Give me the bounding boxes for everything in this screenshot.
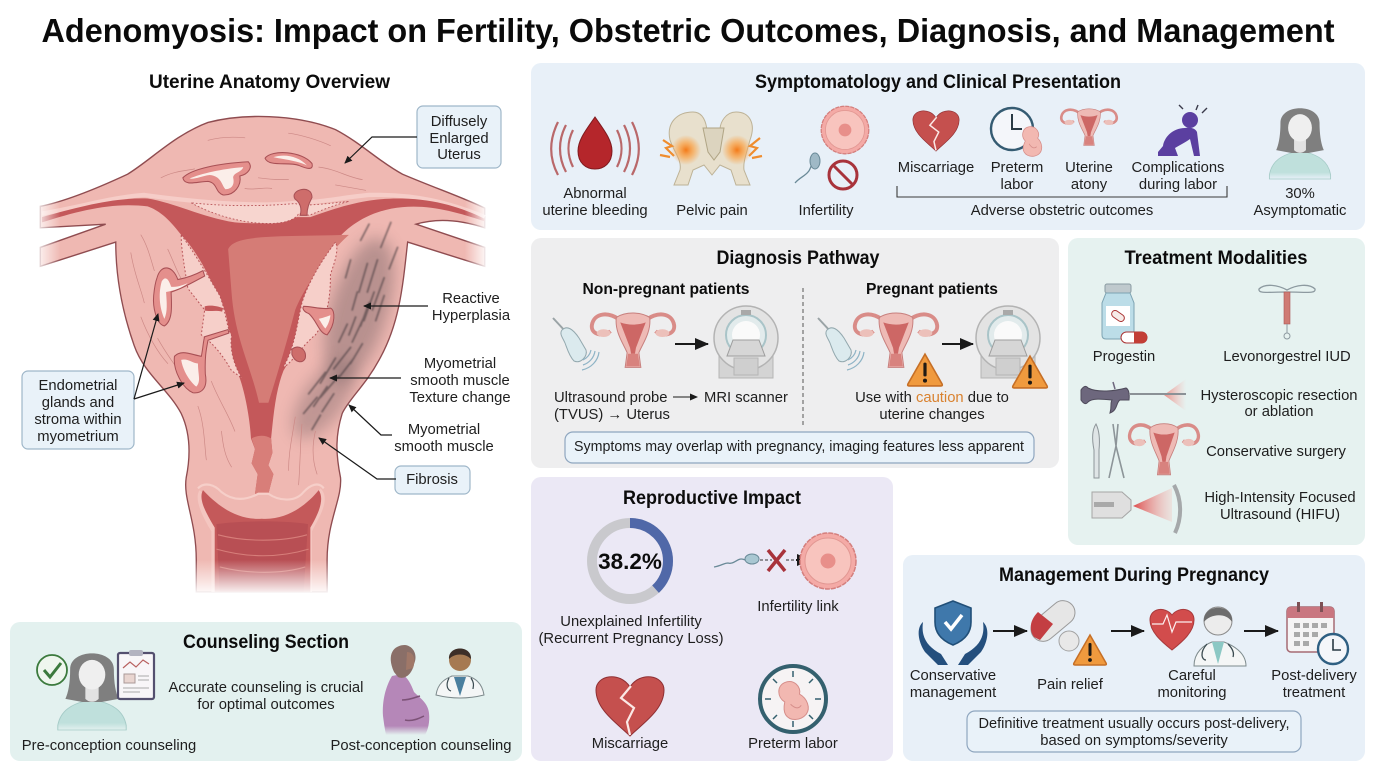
label: myometrial texture change: Texture change	[409, 390, 511, 406]
flow: non-pregnant imaging	[553, 306, 778, 378]
item: complications during labor: during labor	[1139, 177, 1217, 193]
chart: 38.2% donut: Unexplained Infertility	[560, 614, 702, 630]
icon: careful monitoring: monitoring	[1157, 685, 1227, 701]
icon: infertility link	[714, 533, 856, 615]
callout: diffusely enlarged uterus: Enlarged	[429, 131, 489, 147]
text: pregnant caption: uterine changes	[879, 407, 985, 423]
label: pre-conception: Pre-conception counseling	[22, 738, 196, 754]
icon: pregnant woman	[383, 645, 429, 735]
icon: post-delivery treatment: treatment	[1283, 685, 1345, 701]
icon: careful monitoring: Careful	[1168, 668, 1216, 684]
text: pregnant caption: Use with caution due to	[855, 390, 1009, 406]
icon: pain relief: Pain relief	[1037, 677, 1104, 693]
item: progestin	[1093, 284, 1155, 365]
item: hysteroscopic resection	[1081, 379, 1358, 420]
icon: woman	[58, 653, 126, 730]
panel: reproductive impact	[531, 477, 893, 761]
subheading: pregnant: Pregnant patients	[866, 281, 998, 298]
icon: check mark	[37, 655, 67, 685]
panel: symptomatology	[531, 63, 1365, 230]
item: progestin: Progestin	[1093, 349, 1155, 365]
heading: management: Management During Pregnancy	[999, 564, 1269, 586]
item: preterm labor	[991, 108, 1043, 193]
title: Adenomyosis: Impact on Fertility, Obstetric Outcomes, Diagnosis, and Management	[42, 12, 1334, 49]
label: myometrial texture change: smooth muscle	[410, 373, 510, 389]
panel: management during pregnancy	[903, 555, 1365, 761]
item: complications during labor: Complications	[1132, 160, 1224, 176]
icon: miscarriage heart	[592, 677, 668, 752]
item: asymptomatic: 30%	[1285, 186, 1315, 202]
label: myometrial smooth muscle: smooth muscle	[394, 439, 494, 455]
icon: preterm clock: Preterm labor	[748, 736, 838, 752]
item: conservative surgery: Conservative surgery	[1206, 444, 1346, 460]
callout: diffusely enlarged uterus: Uterus	[437, 147, 481, 163]
bracket: adverse obstetric outcomes	[897, 186, 1227, 219]
item: abnormal uterine bleeding: uterine bleeding	[542, 203, 648, 219]
item: HIFU: Ultrasound (HIFU)	[1220, 507, 1340, 523]
flow: pregnant imaging	[818, 306, 1047, 388]
item: asymptomatic	[1254, 108, 1347, 219]
chart: 38.2% donut	[538, 523, 724, 647]
text: counseling message: Accurate counseling is crucial	[169, 680, 363, 696]
panel: uterine anatomy	[22, 71, 511, 596]
label: myometrial texture change	[330, 356, 511, 406]
label: myometrial smooth muscle	[349, 405, 494, 455]
label: reactive hyperplasia	[364, 291, 511, 324]
item: uterine atony: Uterine	[1065, 160, 1113, 176]
item: preterm labor: Preterm	[991, 160, 1043, 176]
label: myometrial texture change: Myometrial	[424, 356, 496, 372]
item: hysteroscopic resection: or ablation	[1244, 404, 1314, 420]
icon: clipboard	[118, 650, 154, 699]
text: non-pregnant caption	[554, 390, 788, 423]
heading: uterine anatomy: Uterine Anatomy Overview	[149, 71, 391, 93]
heading: treatment: Treatment Modalities	[1124, 247, 1308, 269]
heading: reproductive: Reproductive Impact	[623, 487, 801, 509]
icon: conservative management	[910, 601, 996, 701]
icon: miscarriage heart: Miscarriage	[592, 736, 668, 752]
chart: 38.2% donut: (Recurrent Pregnancy Loss)	[538, 631, 724, 647]
label: myometrial smooth muscle: Myometrial	[408, 422, 480, 438]
text: pregnant caption	[855, 390, 1009, 423]
item: complications during labor	[1132, 105, 1224, 193]
icon: preterm clock	[748, 666, 838, 752]
text: counseling message: for optimal outcomes	[197, 697, 335, 713]
icon: conservative management: Conservative	[910, 668, 996, 684]
callout: endometrial glands: glands and	[42, 395, 114, 411]
panel: treatment modalities	[1068, 238, 1365, 545]
bracket: adverse obstetric outcomes: Adverse obstetric outcomes	[971, 203, 1153, 219]
icon: careful monitoring	[1150, 607, 1246, 701]
item: pelvic pain: Pelvic pain	[676, 203, 748, 219]
icon: doctor	[436, 648, 484, 698]
icon: conservative management: management	[910, 685, 996, 701]
heading: counseling: Counseling Section	[183, 631, 349, 653]
label: post-conception: Post-conception counseling	[331, 738, 511, 754]
item: HIFU	[1092, 485, 1356, 533]
callout: fibrosis: Fibrosis	[406, 472, 458, 488]
icon: infertility link: Infertility link	[757, 599, 839, 615]
icon: post-delivery treatment	[1271, 602, 1357, 701]
item: uterine atony: atony	[1071, 177, 1108, 193]
item: levonorgestrel IUD	[1223, 285, 1351, 365]
icon: post-delivery treatment: Post-delivery	[1271, 668, 1357, 684]
text: non-pregnant caption: MRI scanner	[704, 390, 788, 406]
callout: diffusely enlarged uterus	[345, 106, 501, 168]
heading: diagnosis: Diagnosis Pathway	[716, 247, 880, 269]
label: reactive hyperplasia: Reactive	[442, 291, 500, 307]
chart: 38.2% donut: 38.2%	[598, 549, 662, 574]
callout: endometrial glands: Endometrial	[39, 378, 117, 394]
item: miscarriage	[898, 111, 974, 176]
icon: pain relief	[1026, 596, 1106, 693]
callout: overlap note: Symptoms may overlap with pregnancy, imaging features less apparent	[574, 439, 1024, 455]
item: asymptomatic: Asymptomatic	[1254, 203, 1347, 219]
callout: definitive treatment	[967, 711, 1301, 752]
subheading: non-pregnant: Non-pregnant patients	[582, 281, 750, 298]
item: uterine atony	[1061, 109, 1117, 193]
callout: diffusely enlarged uterus: Diffusely	[431, 114, 488, 130]
item: pelvic pain	[660, 112, 762, 219]
callout: endometrial glands: myometrium	[37, 429, 119, 445]
item: conservative surgery	[1093, 424, 1346, 478]
callout: definitive treatment: Definitive treatment usually occurs post-delivery,	[978, 716, 1290, 732]
item: preterm labor: labor	[1001, 177, 1034, 193]
item: hysteroscopic resection: Hysteroscopic resection	[1200, 388, 1358, 404]
callout: definitive treatment: based on symptoms/severity	[1040, 733, 1228, 749]
label: reactive hyperplasia: Hyperplasia	[432, 308, 511, 324]
callout: endometrial glands	[22, 314, 184, 449]
text: non-pregnant caption: Ultrasound probe	[554, 390, 668, 406]
panel: diagnosis pathway	[531, 238, 1059, 468]
item: abnormal uterine bleeding: Abnormal	[563, 186, 627, 202]
illustration: uterus cross-section	[34, 116, 488, 596]
item: HIFU: High-Intensity Focused	[1204, 490, 1356, 506]
panel: counseling	[10, 622, 522, 761]
item: levonorgestrel IUD: Levonorgestrel IUD	[1223, 349, 1351, 365]
heading: symptomatology: Symptomatology and Clinical Presentation	[755, 71, 1121, 93]
text: non-pregnant caption: (TVUS) → Uterus	[554, 407, 670, 423]
item: abnormal uterine bleeding	[542, 117, 648, 219]
item: miscarriage: Miscarriage	[898, 160, 974, 176]
callout: fibrosis	[319, 438, 470, 494]
item: infertility: Infertility	[798, 203, 854, 219]
callout: endometrial glands: stroma within	[34, 412, 122, 428]
text: counseling message	[169, 680, 363, 713]
item: infertility	[795, 106, 869, 219]
callout: overlap note	[565, 432, 1034, 463]
